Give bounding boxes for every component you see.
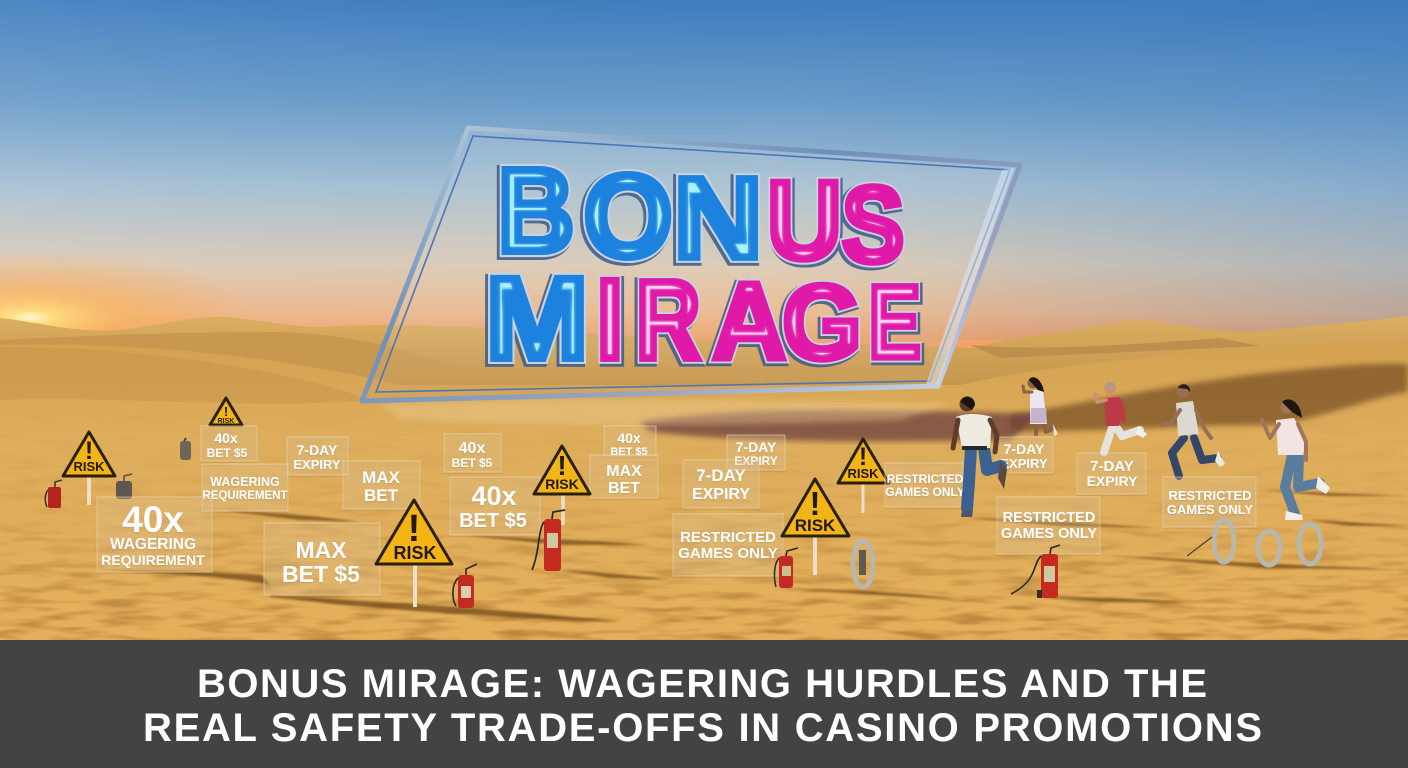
neon tubes: magenta <box>596 159 921 384</box>
glass panel: 7-day expiry faded <box>727 435 785 470</box>
glass panel: 40x bet $5 top: 40x <box>617 430 641 446</box>
risk sign: right large: ! <box>810 485 820 522</box>
risk sign: centre: ! <box>557 450 567 481</box>
runner: person in red shirt <box>1095 382 1147 452</box>
extruded depth: B <box>495 145 573 280</box>
risk sign: far tiny: RISK <box>218 418 234 425</box>
letters: magenta: I <box>596 254 624 384</box>
extruded depth <box>483 145 923 386</box>
glass panel: 7-day expiry behind runner: 7-DAY <box>1004 441 1045 457</box>
glass panel: wagering requirement small <box>202 464 288 511</box>
extruded depth: R <box>633 259 699 385</box>
glass panel: 40x wagering requirement: WAGERING <box>110 536 196 553</box>
extruded depth: M <box>483 254 587 386</box>
silver rims: N <box>673 153 763 283</box>
neon tubes: magenta: E <box>868 264 921 380</box>
glass panel: 7-day expiry right: 7-DAY <box>1090 458 1134 475</box>
glass panel: 7-day expiry: EXPIRY <box>293 457 341 472</box>
risk sign: left: RISK <box>73 459 105 474</box>
glass panel: restricted games only large <box>997 497 1100 554</box>
silver rims: A <box>712 260 786 383</box>
runner: man in grey shirt <box>1162 384 1225 476</box>
runner: woman in white top <box>1262 399 1330 520</box>
risk sign: far tiny <box>210 398 242 425</box>
silver rims <box>485 143 921 384</box>
caption bar: BONUS MIRAGE: WAGERING HURDLES AND THE <box>197 662 1207 706</box>
shadow across right dune <box>380 364 1408 442</box>
glass panel: max bet: MAX <box>362 468 401 487</box>
glass panel: restricted games only far right: GAMES ONLY <box>1167 502 1253 517</box>
letters: blue <box>485 143 763 384</box>
letters: magenta: S <box>841 163 905 285</box>
silver rims: G <box>782 263 862 382</box>
glass panel: 7-day expiry right: EXPIRY <box>1087 473 1138 489</box>
glass panel: 7-day expiry behind runner: EXPIRY <box>1000 456 1048 471</box>
glass panel: 40x bet $5 far left <box>201 426 257 461</box>
glass panel: restricted games only centre: GAMES ONLY <box>678 545 778 562</box>
silver rims: S <box>841 163 905 285</box>
extruded depth: O <box>581 152 671 284</box>
silver rims: M <box>485 252 589 384</box>
extinguisher: red right <box>774 548 798 588</box>
glass panel: wagering requirement small: REQUIREMENT <box>203 490 287 502</box>
glass panel: 40x bet $5 top <box>604 426 656 458</box>
neon title: BONUS MIRAGE <box>483 143 923 386</box>
glass panel: 40x bet $5 large: BET $5 <box>459 510 527 532</box>
extruded depth: N <box>671 155 761 285</box>
risk sign: left: ! <box>85 437 93 465</box>
glass panel: 40x wagering requirement: 40x <box>122 499 184 540</box>
letters: blue: O <box>583 150 673 282</box>
silver rims: O <box>583 150 673 282</box>
silver rims: R <box>635 257 701 383</box>
hose coil: right 3 <box>1299 524 1321 564</box>
neon tubes: magenta: S <box>841 163 905 285</box>
glass panel: restricted games only large: RESTRICTED <box>1003 510 1095 526</box>
neon tubes: magenta: I <box>596 254 624 384</box>
extinguisher: red left <box>45 480 62 508</box>
distant dunes <box>0 316 1408 420</box>
glass panel: 40x bet $5 top: BET $5 <box>610 446 648 458</box>
glass panel: 40x bet $5 centre <box>444 434 501 472</box>
neon tubes: blue: M <box>485 252 589 384</box>
glass panel: 7-day expiry <box>287 437 348 475</box>
sand floor <box>0 340 1408 640</box>
glass panel: max bet: BET <box>364 486 399 505</box>
glass panel: 7-day expiry centre: EXPIRY <box>692 486 750 503</box>
glass panel: 40x wagering requirement <box>97 497 212 572</box>
letters: magenta: U <box>766 159 842 284</box>
letters: blue: B <box>497 143 575 278</box>
glass panel: 40x bet $5 large <box>450 477 540 535</box>
glass panel: 7-day expiry faded: 7-DAY <box>736 439 777 455</box>
glass panel: 7-day expiry faded: EXPIRY <box>734 454 778 468</box>
glass panel: 40x bet $5 centre: 40x <box>459 440 485 457</box>
runner: woman far <box>1023 377 1058 436</box>
glass panel: max bet <box>343 461 420 509</box>
risk sign: centre: RISK <box>545 476 579 492</box>
letters: magenta: R <box>635 257 701 383</box>
silver rims: I <box>596 254 624 384</box>
glass billboard frame <box>362 128 1020 401</box>
neon tubes: magenta: A <box>712 260 786 383</box>
glass panel: wagering requirement small: WAGERING <box>210 475 280 489</box>
glass panel: 40x wagering requirement: REQUIREMENT <box>101 552 205 568</box>
glass panel: 7-day expiry centre: 7-DAY <box>696 466 746 485</box>
glass panel: max bet $5: BET $5 <box>282 561 360 587</box>
letters: blue: M <box>485 252 589 384</box>
risk sign: right small <box>838 439 889 513</box>
glass panel: restricted games only far right <box>1163 477 1256 527</box>
ground shadows <box>100 490 1408 622</box>
silver rims: U <box>766 159 842 284</box>
risk sign: large: RISK <box>393 543 437 563</box>
letters: magenta: E <box>868 264 921 380</box>
glass panel: 7-day expiry centre <box>683 460 759 508</box>
extruded depth: I <box>598 256 626 386</box>
extinguisher: red tall <box>532 510 565 571</box>
risk sign: large: ! <box>408 508 420 550</box>
glass panel: 40x bet $5 far left: BET $5 <box>207 446 248 460</box>
glass panel: max bet $5 <box>264 523 380 595</box>
glass panel: 40x bet $5 centre: BET $5 <box>452 456 493 470</box>
neon tubes: blue <box>485 143 763 384</box>
glass panel: 7-day expiry behind runner <box>995 437 1053 473</box>
caption bar: REAL SAFETY TRADE-OFFS IN CASINO PROMOTIONS <box>143 706 1262 750</box>
letters: magenta: G <box>782 263 862 382</box>
caption bar <box>0 640 1408 768</box>
glass panel: restricted games only right small <box>885 463 965 507</box>
glass panel: 40x bet $5 large: 40x <box>471 481 517 511</box>
risk sign: right small: ! <box>859 443 867 471</box>
glass panel: 7-day expiry: 7-DAY <box>297 442 338 458</box>
extinguisher: red with hose <box>1011 545 1060 598</box>
neon tubes: blue: O <box>583 150 673 282</box>
extinguisher: grey <box>116 474 132 499</box>
neon tubes: blue: N <box>673 153 763 283</box>
glass panel: restricted games only far right: RESTRICTED <box>1168 488 1252 503</box>
letters: magenta: A <box>712 260 786 383</box>
glass panel: restricted games only large: GAMES ONLY <box>1001 526 1097 542</box>
glass panel: max bet $5: MAX <box>295 537 347 563</box>
risk sign: right large <box>782 479 849 575</box>
runner: man in white shirt <box>953 396 1007 517</box>
glass panel: max bet centre: MAX <box>606 463 642 480</box>
hose coil: right 2 <box>1258 531 1280 565</box>
neon tubes: magenta: G <box>782 263 862 382</box>
silver rims: E <box>868 264 921 380</box>
extruded depth: A <box>710 262 784 385</box>
glass panel: 40x bet $5 far left: 40x <box>214 430 238 446</box>
risk sign: large <box>376 500 452 607</box>
extruded depth: S <box>839 165 902 287</box>
glass panel: 7-day expiry right <box>1077 453 1146 494</box>
extruded depth: E <box>870 266 923 382</box>
glass panel: max bet centre <box>590 455 658 498</box>
extinguisher: grey far <box>180 438 191 460</box>
extruded depth: G <box>780 265 860 384</box>
risk sign: left <box>63 432 115 505</box>
neon tubes: magenta: U <box>766 159 842 284</box>
hose coil <box>853 541 873 587</box>
extruded depth: U <box>768 161 844 286</box>
letters: magenta <box>596 159 921 384</box>
risk sign: far tiny: ! <box>224 404 228 419</box>
neon tubes: blue: B <box>497 143 575 278</box>
glass panel: restricted games only right small: RESTRICTED <box>887 472 964 486</box>
risk sign: right large: RISK <box>795 516 836 535</box>
glass panel: max bet centre: BET <box>608 480 640 497</box>
sky <box>0 0 1408 420</box>
silver rims: B <box>497 143 575 278</box>
glass panel: restricted games only centre: RESTRICTED <box>680 529 776 546</box>
glass panel: restricted games only right small: GAMES ONLY <box>885 485 965 499</box>
glass panel: restricted games only centre <box>673 514 783 576</box>
neon tubes: magenta: R <box>635 257 701 383</box>
risk sign: right small: RISK <box>847 466 879 481</box>
letters: blue: N <box>673 153 763 283</box>
risk sign: centre <box>534 446 590 525</box>
hose coil: right 1 <box>1187 520 1234 562</box>
extinguisher: red centre <box>453 564 477 608</box>
